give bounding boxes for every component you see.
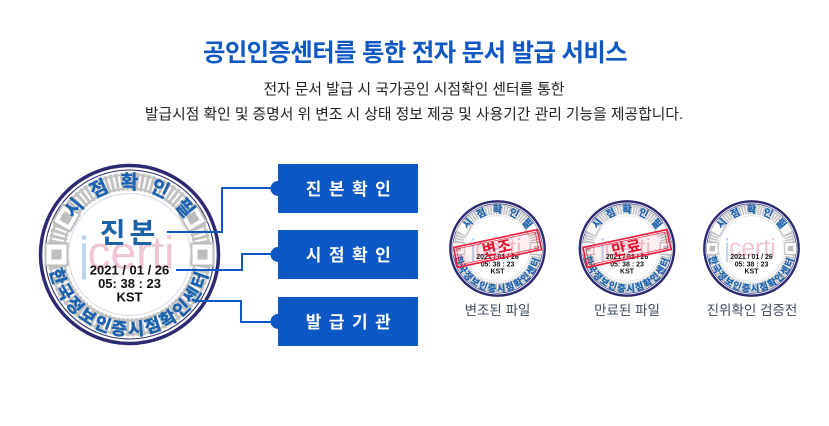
button: genuine check <box>270 164 418 213</box>
small stamp: forgery check: 시 <box>750 283 760 294</box>
caption: expired: 만료된 파일 <box>594 303 660 318</box>
caption: forgery check: 진위확인 검증전 <box>707 303 797 318</box>
genuine label: 진본 <box>100 218 159 248</box>
small stamp: forgery check: 인 <box>731 280 743 292</box>
small stamp: forgery check: 증 <box>741 283 751 294</box>
small stamp: forgery check: 확 <box>747 203 757 216</box>
connector: genuine check <box>167 188 272 232</box>
seal text top: 시 <box>61 195 88 222</box>
small stamp: forgery check: 시 <box>714 216 730 231</box>
small stamp: forgery check: 정 <box>715 269 729 283</box>
small stamp: tampered: 인 <box>507 206 520 221</box>
seal text bottom: 인 <box>92 312 114 337</box>
small stamp: expired: 센 <box>654 264 667 277</box>
small stamp: forgery check: 인 <box>761 206 774 221</box>
title: 공인인증센터를 통한 전자 문서 발급 서비스 <box>203 40 627 67</box>
small stamp: expired: 한 <box>582 254 595 266</box>
small stamp: expired: 정 <box>591 269 604 283</box>
small stamp: tampered: 보 <box>469 275 482 289</box>
small stamp: expired: 인 <box>607 280 618 292</box>
small stamp: tampered: 시 <box>460 216 476 231</box>
seal text top: 점 <box>86 176 112 203</box>
seal text bottom: 보 <box>75 304 100 329</box>
small stamp: tampered <box>450 201 545 296</box>
small stamp: expired: 만료 <box>610 236 644 260</box>
connector: timestamp check <box>176 254 272 270</box>
small stamp: expired: 증 <box>616 283 627 294</box>
timestamp: 2021 / 01 / 26 <box>90 262 169 278</box>
seal text bottom: 국 <box>52 280 77 304</box>
small stamp: expired: 보 <box>598 275 611 289</box>
small stamp: forgery check: 05: 38 : 23 <box>735 261 768 268</box>
seal text bottom <box>46 266 212 340</box>
button: genuine check: 진본확인 <box>306 180 398 199</box>
caption: tampered: 변조된 파일 <box>465 303 530 318</box>
small stamp: tampered: 변조 <box>481 236 514 260</box>
small stamp: forgery check: 확 <box>766 276 779 290</box>
small stamp: forgery check: 터 <box>783 257 796 268</box>
small stamp: tampered: certi <box>475 235 522 262</box>
small stamp: forgery check: 국 <box>710 262 723 275</box>
small stamp: tampered: 국 <box>456 262 469 275</box>
button: timestamp check <box>270 230 418 279</box>
small stamp: forgery check: 보 <box>723 275 736 289</box>
small stamp: expired: 점 <box>634 280 645 293</box>
small stamp: tampered: 인 <box>477 280 489 292</box>
small stamp: tampered: 인 <box>519 271 532 284</box>
timestamp: KST <box>116 290 143 304</box>
seal text bottom: 시 <box>127 319 145 340</box>
small stamp: expired: 시 <box>626 283 635 294</box>
button: issuer: 발급기관 <box>306 313 398 332</box>
small stamp: expired: 인 <box>648 271 662 284</box>
small stamp: tampered: 점 <box>504 280 516 293</box>
seal text bottom: 센 <box>180 283 205 308</box>
watermark: certi <box>88 226 174 278</box>
description: 전자 문서 발급 시 국가공인 시점확인 센터를 통한 <box>263 81 565 98</box>
small stamp: expired: 국 <box>586 262 599 275</box>
small stamp: tampered: 정 <box>461 269 475 283</box>
seal text bottom: 증 <box>110 318 128 340</box>
small stamp: expired: 확 <box>622 203 632 216</box>
connector: issuer <box>197 301 272 322</box>
small stamp: tampered: 증 <box>487 283 497 294</box>
small stamp: expired: certi <box>604 235 651 262</box>
seal text bottom: 인 <box>169 296 194 321</box>
small stamp: expired <box>580 201 674 296</box>
main stamp <box>40 166 218 344</box>
small stamp: tampered: KST <box>491 269 505 276</box>
small stamp: tampered: 한 <box>453 254 466 266</box>
small stamp: forgery check <box>704 201 799 296</box>
small stamp: tampered: 터 <box>529 257 542 268</box>
small stamp: forgery check: 2021 / 01 / 26 <box>730 254 773 261</box>
small stamp: expired: 점 <box>604 206 618 221</box>
description: 발급시점 확인 및 증명서 위 변조 시 상태 정보 제공 및 사용기간 관리 기능을 제공합니다. <box>145 106 683 123</box>
small stamp: forgery check: 점 <box>758 280 770 293</box>
seal text top: 인 <box>147 176 173 203</box>
seal text bottom: 점 <box>142 314 163 338</box>
seal text bottom: 한 <box>46 266 70 287</box>
seal text bottom: 확 <box>156 306 180 332</box>
small stamp: tampered: 확 <box>512 276 525 290</box>
button: timestamp check: 시점확인 <box>306 246 398 265</box>
small stamp: forgery check: 필 <box>773 216 789 231</box>
small stamp: expired: 터 <box>659 257 671 268</box>
button: issuer <box>270 297 418 346</box>
small stamp: forgery check: 인 <box>773 271 786 284</box>
small stamp: tampered: 05: 38 : 23 <box>481 261 514 268</box>
small stamp: expired: 필 <box>649 216 664 231</box>
small stamp: tampered: 2021 / 01 / 26 <box>476 254 519 261</box>
small stamp: expired: 확 <box>641 276 654 290</box>
small stamp: tampered: 필 <box>519 216 535 231</box>
small stamp: tampered: 점 <box>475 206 488 221</box>
seal text top: 확 <box>121 172 138 194</box>
small stamp: expired: 시 <box>590 216 605 231</box>
small stamp: forgery check: 점 <box>729 206 742 221</box>
description <box>145 81 683 123</box>
small stamp: expired: KST <box>620 269 635 276</box>
small stamp: expired: 2021 / 01 / 26 <box>606 254 648 261</box>
seal text top <box>61 172 199 222</box>
small stamp: expired: 05: 38 : 23 <box>610 261 644 268</box>
timestamp <box>90 262 169 304</box>
small stamp: forgery check: 센 <box>778 264 792 277</box>
seal text bottom: 정 <box>62 293 87 318</box>
small stamp: forgery check: 한 <box>707 254 720 266</box>
small stamp: tampered: 확 <box>493 203 503 216</box>
timestamp: 05: 38 : 23 <box>98 276 161 291</box>
small stamp: tampered: 시 <box>496 283 506 294</box>
small stamp: forgery check: KST <box>745 269 759 276</box>
seal text top: 필 <box>171 194 199 222</box>
seal text bottom: 터 <box>188 269 212 291</box>
small stamp: tampered: 센 <box>524 264 538 277</box>
small stamp: expired: 인 <box>636 206 650 221</box>
small stamp: forgery check: certi <box>729 235 776 262</box>
